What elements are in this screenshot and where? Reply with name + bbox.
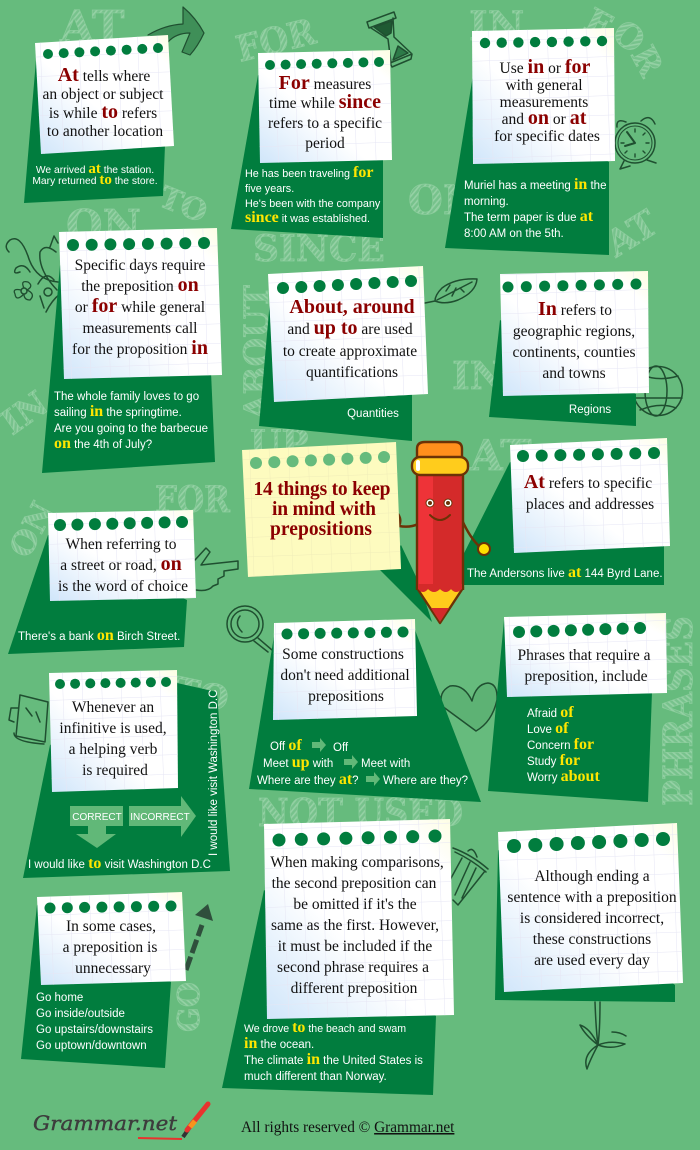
example: The Andersons live at 144 Byrd Lane.: [467, 564, 663, 581]
ghost letters: IN: [469, 3, 524, 50]
ghost letters: NOT USED: [258, 790, 463, 835]
rule text: sentence with a preposition: [507, 889, 677, 906]
rule text: geographic regions,: [513, 323, 635, 340]
examples: Go home: [36, 992, 83, 1004]
green backing: [42, 265, 215, 473]
correct arrow: CORRECT: [72, 812, 122, 823]
rule text: Some constructions: [282, 646, 404, 663]
ghost letters: FOR: [155, 479, 231, 521]
panel: comparisons: [222, 819, 454, 1095]
body: [417, 472, 463, 590]
rule text: Specific days require: [75, 257, 206, 274]
ghost letters: UP: [250, 423, 308, 465]
ferrule: [412, 457, 468, 475]
rule text: period: [305, 135, 345, 152]
right arm and hand: [462, 520, 490, 555]
examples: The whole family loves to go: [54, 391, 199, 403]
examples: Go upstairs/downstairs: [36, 1024, 153, 1036]
panel: quantities: [259, 266, 428, 441]
punched holes: [272, 830, 442, 846]
examples: much different than Norway.: [244, 1071, 387, 1083]
rule text: for the proposition in: [72, 337, 208, 359]
label: Regions: [569, 404, 611, 416]
rule text: or for while general: [75, 295, 205, 317]
incorrect arrow: [129, 796, 196, 837]
rule text: measurements call: [83, 320, 197, 337]
examples: 8:00 AM on the 5th.: [464, 228, 564, 240]
green backing: [448, 462, 664, 585]
punched holes: [277, 275, 417, 294]
green backing: [495, 850, 675, 1002]
ghost letters: GO: [172, 982, 207, 1032]
label: Quantities: [347, 408, 399, 420]
wordmark: Grammar.net: [33, 1111, 178, 1135]
panel: regions: [489, 271, 649, 426]
rule text: same as the first. However,: [271, 917, 439, 934]
rule text: don't need additional: [280, 667, 410, 684]
rule text: and up to are used: [287, 317, 413, 339]
ghost letters: FOR: [232, 10, 321, 71]
panel: infinitive: [23, 670, 230, 878]
rule text: it must be included if the: [278, 938, 432, 955]
examples: Go uptown/downtown: [36, 1040, 147, 1052]
rule text: the second preposition can: [272, 875, 437, 892]
face: [426, 499, 452, 520]
rule text: Although ending a: [534, 868, 650, 885]
rule text: an object or subject: [43, 86, 164, 103]
mini arrows: [312, 738, 380, 786]
rule text: continents, counties: [512, 344, 636, 361]
rule text: to create approximate: [283, 343, 417, 360]
vertical example: I would like visit Washington D.C: [208, 690, 220, 856]
icon: cup: [9, 695, 48, 744]
green backing: [231, 75, 383, 238]
icon: magnifier: [227, 606, 272, 652]
rule text: preposition, include: [524, 668, 648, 685]
panel: street or road: [8, 510, 196, 654]
rule text: is while to refers: [49, 101, 157, 123]
rule text: to another location: [47, 123, 163, 140]
rule text: When referring to: [65, 536, 177, 553]
note paper: [500, 271, 649, 396]
note paper: [264, 819, 454, 1019]
note paper: [472, 28, 615, 164]
examples: Go inside/outside: [36, 1008, 125, 1020]
panel: unnecessary: [21, 892, 186, 1068]
ghost letters: R: [622, 39, 671, 84]
rule text: At tells where: [58, 64, 150, 86]
examples: Love of: [527, 720, 568, 737]
punched holes: [67, 237, 210, 251]
rule text: with general: [505, 77, 583, 94]
panel: in, for, on, at: [445, 28, 615, 255]
note paper: [273, 619, 417, 720]
punched holes: [282, 626, 408, 640]
examples: Are you going to the barbecue: [54, 423, 208, 435]
rule text: for specific dates: [494, 128, 600, 145]
rule text: is considered incorrect,: [520, 910, 664, 927]
ghost letters: TO: [154, 180, 212, 231]
rule text: infinitive is used,: [59, 720, 167, 737]
examples: Off: [333, 742, 349, 754]
punched holes: [43, 43, 163, 59]
footer credit: All rights reserved © Grammar.net: [241, 1119, 455, 1136]
examples: Meet up with: [263, 754, 333, 771]
ghost letters: TO: [170, 670, 232, 720]
examples: He has been traveling for: [245, 164, 373, 181]
icon: leaf: [425, 279, 477, 303]
ghost letters: AT: [59, 2, 125, 53]
ghost letters: ABOUT: [237, 285, 277, 421]
rule text: For measures: [279, 72, 371, 94]
incorrect arrow: INCORRECT: [130, 812, 190, 823]
icon: curved arrow: [148, 7, 204, 55]
panel: phrases: [488, 613, 667, 802]
icon: flourish: [6, 236, 60, 312]
examples: Meet with: [361, 758, 410, 770]
examples: sailing in the springtime.: [54, 403, 182, 420]
pencil shadow: [380, 545, 432, 622]
icon: heart: [441, 683, 497, 731]
rule text: a preposition is: [63, 939, 157, 956]
examples: morning.: [464, 196, 509, 208]
icon: dashed arrow: [186, 904, 213, 970]
punched holes: [55, 677, 171, 689]
rule text: these constructions: [533, 931, 651, 948]
rule text: second phrase requires a: [277, 959, 429, 976]
rule text: In some cases,: [66, 918, 156, 935]
punched holes: [517, 447, 660, 462]
rule text: At refers to specific: [524, 471, 652, 493]
rule text: unnecessary: [75, 960, 151, 977]
ghost letters: AT: [469, 431, 532, 480]
panel: ending with a preposition: [495, 823, 683, 1002]
examples: on the 4th of July?: [54, 435, 152, 452]
punched holes: [507, 832, 670, 853]
rule text: different preposition: [291, 980, 418, 997]
examples: He's been with the company: [245, 198, 381, 210]
punched holes: [265, 57, 384, 70]
examples: The term paper is due at: [464, 208, 593, 225]
ghost letters: ON: [408, 177, 479, 224]
examples: Worry about: [527, 768, 600, 785]
rule text: About, around: [289, 296, 415, 318]
green backing: [489, 320, 636, 426]
green backing: [23, 683, 230, 878]
examples: five years.: [245, 183, 294, 195]
rule text: quantifications: [306, 364, 398, 381]
rule text: and towns: [542, 365, 606, 382]
note paper: [48, 510, 196, 601]
green backing: [24, 60, 165, 203]
left arm: [398, 514, 418, 527]
note paper: [37, 892, 186, 985]
punched holes: [513, 622, 646, 638]
green backing: [259, 300, 412, 441]
rule text: be omitted if it's the: [293, 896, 417, 913]
rule text: are used every day: [534, 952, 650, 969]
pen: [138, 1104, 208, 1139]
note paper: [242, 442, 401, 577]
rule text: is the word of choice: [58, 578, 188, 595]
examples: The climate in the United States is: [244, 1051, 423, 1068]
rule text: Whenever an: [72, 699, 154, 716]
example: There's a bank on Birch Street.: [18, 627, 180, 644]
icon: plant: [580, 1002, 626, 1069]
rule text: In refers to: [538, 298, 612, 320]
examples: Where are they at?: [257, 771, 359, 788]
ghost letters: ON: [66, 201, 141, 250]
icon: hourglass: [367, 12, 412, 67]
ghost letters: F: [578, 1, 618, 47]
rule text: is required: [82, 762, 148, 779]
panel: at addresses: [448, 438, 670, 585]
title note: [242, 442, 418, 577]
panel: specific days: [42, 228, 222, 473]
examples: Off of: [270, 737, 302, 754]
green backing: [249, 630, 481, 802]
ghost letters: O: [604, 12, 653, 62]
note paper: [510, 438, 670, 553]
examples: We arrived at the station.: [36, 161, 154, 177]
note paper: [258, 50, 392, 163]
note paper: [498, 823, 683, 992]
rule text: Phrases that require a: [518, 647, 651, 664]
title: in mind with: [272, 499, 376, 520]
horizontal example: I would like to visit Washington D.C: [28, 855, 211, 872]
note paper: [268, 266, 428, 402]
icon: globe: [634, 366, 682, 416]
examples: Afraid of: [527, 704, 574, 721]
rule text: measurements: [500, 94, 588, 111]
title: 14 things to keep: [254, 479, 391, 500]
punched holes: [44, 900, 176, 914]
rule text: the preposition on: [81, 274, 199, 296]
eraser: [417, 442, 462, 460]
rule text: a street or road, on: [60, 553, 182, 575]
pencil mascot: [412, 442, 490, 623]
note paper: [59, 228, 222, 379]
ghost letters: ON: [2, 495, 62, 564]
rule text: a helping verb: [69, 741, 158, 758]
examples: in the ocean.: [244, 1035, 314, 1052]
tip: [417, 584, 463, 623]
examples: We drove to the beach and swam: [244, 1019, 406, 1036]
ghost letters: IN: [452, 353, 505, 398]
green backing: [21, 905, 171, 1068]
rule text: refers to a specific: [268, 115, 382, 132]
footer logo: [33, 1104, 208, 1139]
green backing: [8, 535, 187, 654]
note paper: [504, 613, 667, 697]
punched holes: [54, 516, 188, 531]
rule text: When making comparisons,: [270, 854, 444, 871]
title: prepositions: [270, 519, 372, 540]
examples: Where are they?: [383, 775, 468, 787]
panel: at and to: [24, 35, 174, 203]
green backing: [488, 620, 652, 802]
panel: no additional prepositions: [249, 619, 481, 802]
ghost letters: AT: [598, 202, 666, 266]
note paper: [35, 35, 174, 154]
rule text: time while since: [269, 91, 381, 113]
icon: alarm clock: [615, 118, 656, 169]
examples: Study for: [527, 752, 580, 769]
icon: pointing hand: [195, 548, 238, 590]
punched holes: [250, 451, 390, 469]
punched holes: [480, 36, 607, 48]
examples: Mary returned to the store.: [32, 172, 158, 188]
rule text: prepositions: [308, 688, 384, 705]
punched holes: [502, 278, 642, 292]
panel: for and since: [231, 50, 392, 238]
note paper: [49, 670, 178, 792]
ghost letters: SINCE: [253, 228, 385, 270]
rule text: Use in or for: [500, 56, 590, 78]
correct arrow: [70, 806, 123, 848]
examples: Concern for: [527, 736, 594, 753]
rule text: and on or at: [502, 107, 586, 129]
examples: Muriel has a meeting in the: [464, 176, 606, 193]
rule text: places and addresses: [526, 496, 654, 513]
green backing: [222, 890, 436, 1095]
examples: since it was established.: [245, 209, 370, 226]
green backing: [445, 75, 609, 255]
icon: trash can: [450, 848, 488, 905]
